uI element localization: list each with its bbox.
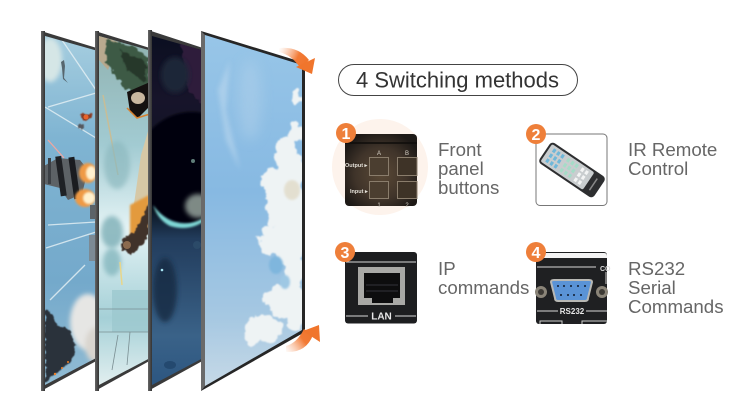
label: RS232 serial commands: RS232 [628,258,685,279]
icon: RS232 port [535,252,611,324]
panel: screen 4 sky and clouds [201,30,308,391]
label: front panel buttons: panel [438,158,484,179]
badge: 2: 2 [532,127,541,144]
icon: front panel buttons [332,119,428,215]
arrow: top orange curved arrow [279,48,315,74]
icon: front panel buttons: B [405,151,409,157]
badge: 3: 3 [341,245,350,262]
label: IR remote control: Control [628,158,688,179]
icon: RS232 port: RS232 [560,307,585,316]
icon: RS232 port: CO [600,266,611,273]
method 4: RS232 serial commands [526,242,724,324]
panel: screen 1 battle scene [41,31,95,391]
panel: screen 2 robot scene [95,30,153,391]
badge: 1 [336,123,356,143]
title: 4 Switching methods: 4 Switching methods [356,68,559,92]
method 1: front panel buttons [332,119,499,215]
badge: 4 [526,242,546,262]
badge: 4: 4 [532,245,541,262]
icon: front panel buttons: Input ▸ [350,189,369,195]
label: RS232 serial commands: Commands [628,296,724,317]
icon: front panel buttons: Output ▸ [345,163,369,169]
label: front panel buttons: Front [438,139,482,160]
title: 4 Switching methods [338,64,578,96]
badge: 3 [335,242,355,262]
panel: screen 3 space scene [148,30,201,391]
label: RS232 serial commands: Serial [628,277,676,298]
label: front panel buttons: buttons [438,177,499,198]
icon: IR remote [536,134,607,206]
icon: front panel buttons: 1 [377,203,381,209]
label: IP commands: IP [438,258,456,279]
icon: LAN port [345,252,417,324]
arrow: bottom orange curved arrow [286,325,320,352]
label: IP commands: commands [438,277,529,298]
label: IR remote control: IR Remote [628,139,717,160]
badge: 1: 1 [342,126,351,143]
icon: front panel buttons: A [377,151,381,157]
icon: front panel buttons: 2 [405,203,409,209]
method 3: IP commands [335,242,529,324]
icon: LAN port: LAN [371,312,392,322]
badge: 2 [526,124,546,144]
method 2: IR remote control [526,124,717,206]
